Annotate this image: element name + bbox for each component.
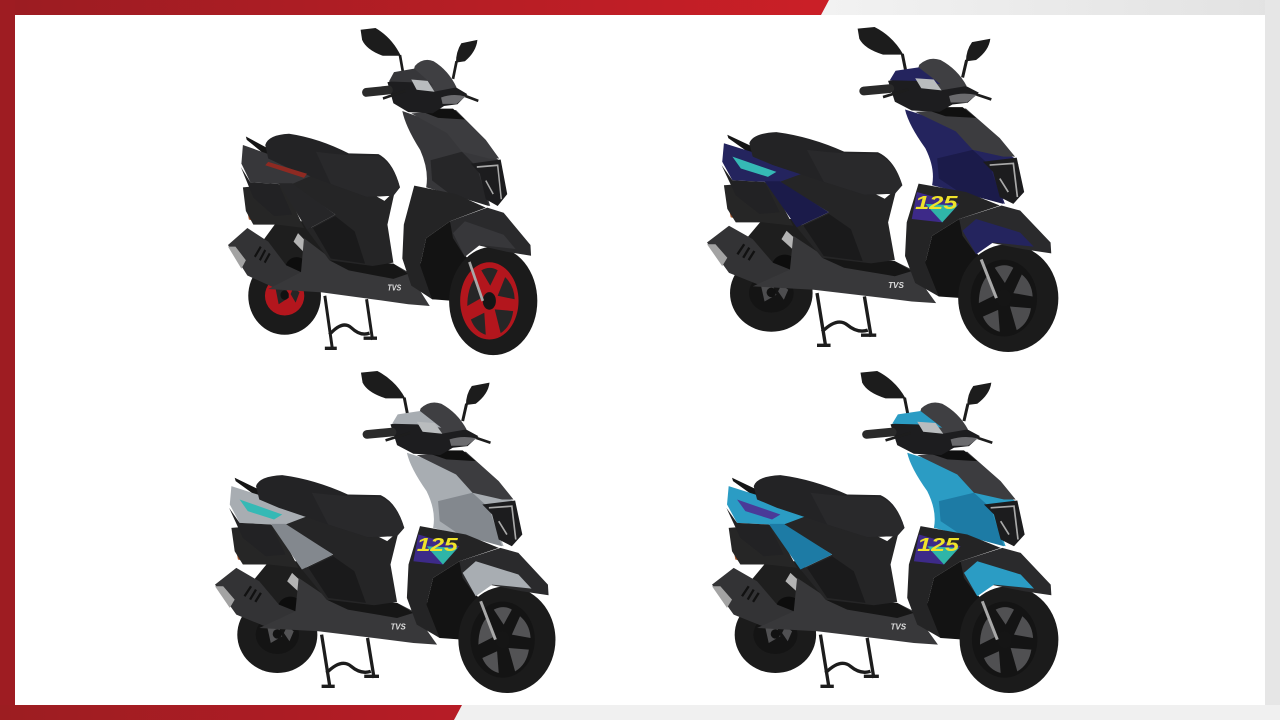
decal: 125 badge	[912, 192, 959, 222]
decal: rear panel stripe	[737, 499, 780, 519]
frame: top red band	[0, 0, 829, 15]
frame: bottom grey band	[455, 705, 1280, 720]
frame: right grey band	[1265, 0, 1280, 720]
decal: rear panel stripe	[240, 499, 282, 519]
scooter: navy blue variant	[707, 27, 1058, 352]
decal: 125 badge: 125	[917, 534, 960, 555]
label: TVS logo: TVS	[888, 281, 904, 290]
decal: rear panel stripe	[732, 157, 776, 177]
decal: 125 badge	[914, 534, 961, 565]
decal: 125 badge: 125	[417, 534, 459, 555]
decal: 125 badge	[413, 534, 459, 565]
frame: bottom red band	[0, 705, 462, 720]
scooter: grey variant	[215, 371, 555, 693]
decal: 125 badge: 125	[915, 193, 958, 214]
decal: red side stripe	[265, 162, 307, 178]
label: TVS logo: TVS	[891, 623, 907, 632]
label: TVS logo: TVS	[390, 623, 406, 632]
scooter: teal blue variant	[712, 371, 1058, 693]
frame: top grey band	[820, 0, 1280, 15]
label: TVS logo: TVS	[387, 283, 402, 293]
scooter: black and red variant	[228, 28, 537, 355]
frame: left red band	[0, 0, 15, 720]
